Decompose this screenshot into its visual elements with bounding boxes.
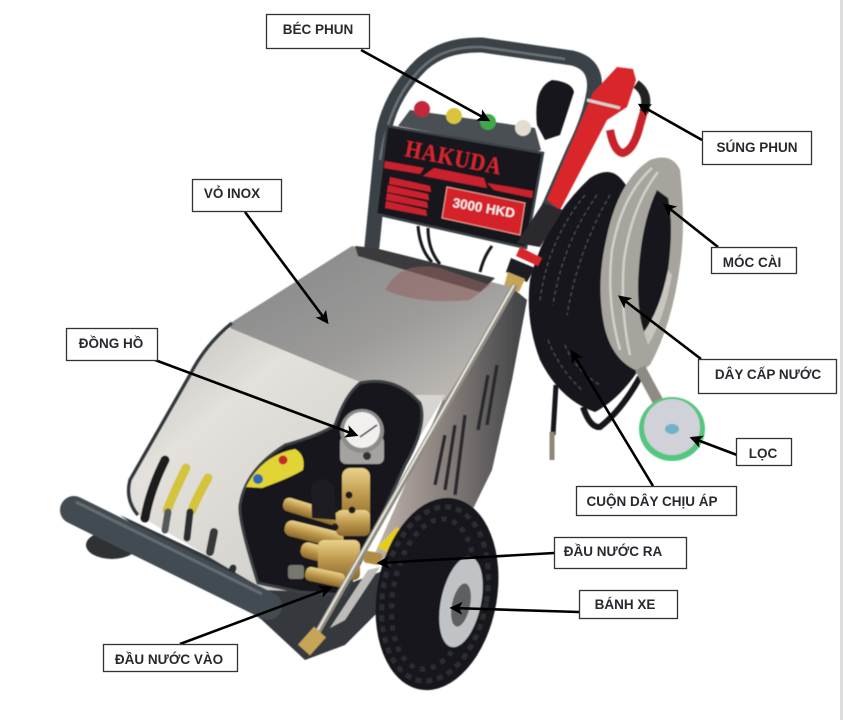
stainless steel top cover <box>228 246 515 400</box>
pump compartment <box>240 381 422 595</box>
label: đầu nước ra <box>554 538 686 568</box>
arrow: móc cài <box>665 205 718 247</box>
frame handle <box>372 45 595 246</box>
arrow: vỏ inox <box>245 212 327 322</box>
rear small wheel <box>86 531 138 559</box>
red spray gun <box>504 67 646 292</box>
machine body side <box>372 290 527 560</box>
yellow motor label <box>246 449 304 488</box>
label: súng phun: SÚNG PHUN <box>716 140 798 155</box>
arrow: đầu nước vào <box>180 588 330 644</box>
gray water hose coil <box>600 158 683 420</box>
label: dây cấp nước <box>698 360 836 394</box>
label: lọc <box>736 438 792 466</box>
data sticker <box>330 567 380 628</box>
lower dark chassis <box>120 515 412 660</box>
label: đồng hồ <box>66 328 158 360</box>
panel wires <box>418 226 492 272</box>
label: đầu nước vào <box>104 644 238 672</box>
black oil cap <box>311 479 336 520</box>
stainless steel front cover <box>129 328 445 593</box>
label: vỏ inox: VỎ INOX <box>204 186 260 201</box>
label: đầu nước ra: ĐẦU NƯỚC RA <box>564 544 662 559</box>
black hose stub behind handle <box>536 80 574 140</box>
arrow: súng phun <box>640 105 702 140</box>
model text: 3000 HKD <box>451 195 516 221</box>
label: bánh xe <box>580 590 678 618</box>
pressure washer illustration <box>74 45 705 700</box>
label: bánh xe: BÁNH XE <box>595 597 655 612</box>
label: móc cài: MÓC CÀI <box>723 255 781 270</box>
brand text: HAKUDA <box>403 135 504 180</box>
label: béc phun <box>266 14 370 48</box>
label: đồng hồ: ĐỒNG HỒ <box>79 336 143 351</box>
callout arrows <box>155 50 737 644</box>
arrow: đồng hồ <box>155 360 356 435</box>
wheel <box>361 488 513 700</box>
label: cuộn dây chịu áp <box>576 486 736 516</box>
front bumper <box>74 510 268 606</box>
control panel top <box>398 101 541 152</box>
arrow: bánh xe <box>452 608 579 612</box>
label: béc phun: BÉC PHUN <box>283 22 353 37</box>
arrow: dây cấp nước <box>620 297 701 359</box>
brass outlet <box>363 551 383 565</box>
label: súng phun <box>702 132 812 164</box>
arrow: cuộn dây chịu áp <box>572 352 653 486</box>
label: lọc: LỌC <box>749 446 777 461</box>
spray lance <box>304 285 515 650</box>
label: dây cấp nước: DÂY CẤP NƯỚC <box>715 367 821 382</box>
arrow: béc phun <box>361 50 488 120</box>
warning sticker <box>377 527 412 557</box>
label: cuộn dây chịu áp: CUỘN DÂY CHỊU ÁP <box>586 494 718 509</box>
brass pump <box>281 468 370 588</box>
label: đầu nước vào: ĐẦU NƯỚC VÀO <box>115 652 223 667</box>
control panel <box>376 126 543 248</box>
filter <box>639 397 705 461</box>
nozzle tips <box>414 101 430 117</box>
arrow: đầu nước ra <box>379 553 554 563</box>
wheel rim <box>432 553 490 651</box>
arrow: lọc <box>692 438 737 455</box>
vent slots <box>145 460 233 574</box>
pressure gauge <box>340 409 384 464</box>
black pressure hose coil <box>529 172 645 460</box>
label: móc cài <box>712 248 796 274</box>
label: vỏ inox <box>192 180 282 212</box>
